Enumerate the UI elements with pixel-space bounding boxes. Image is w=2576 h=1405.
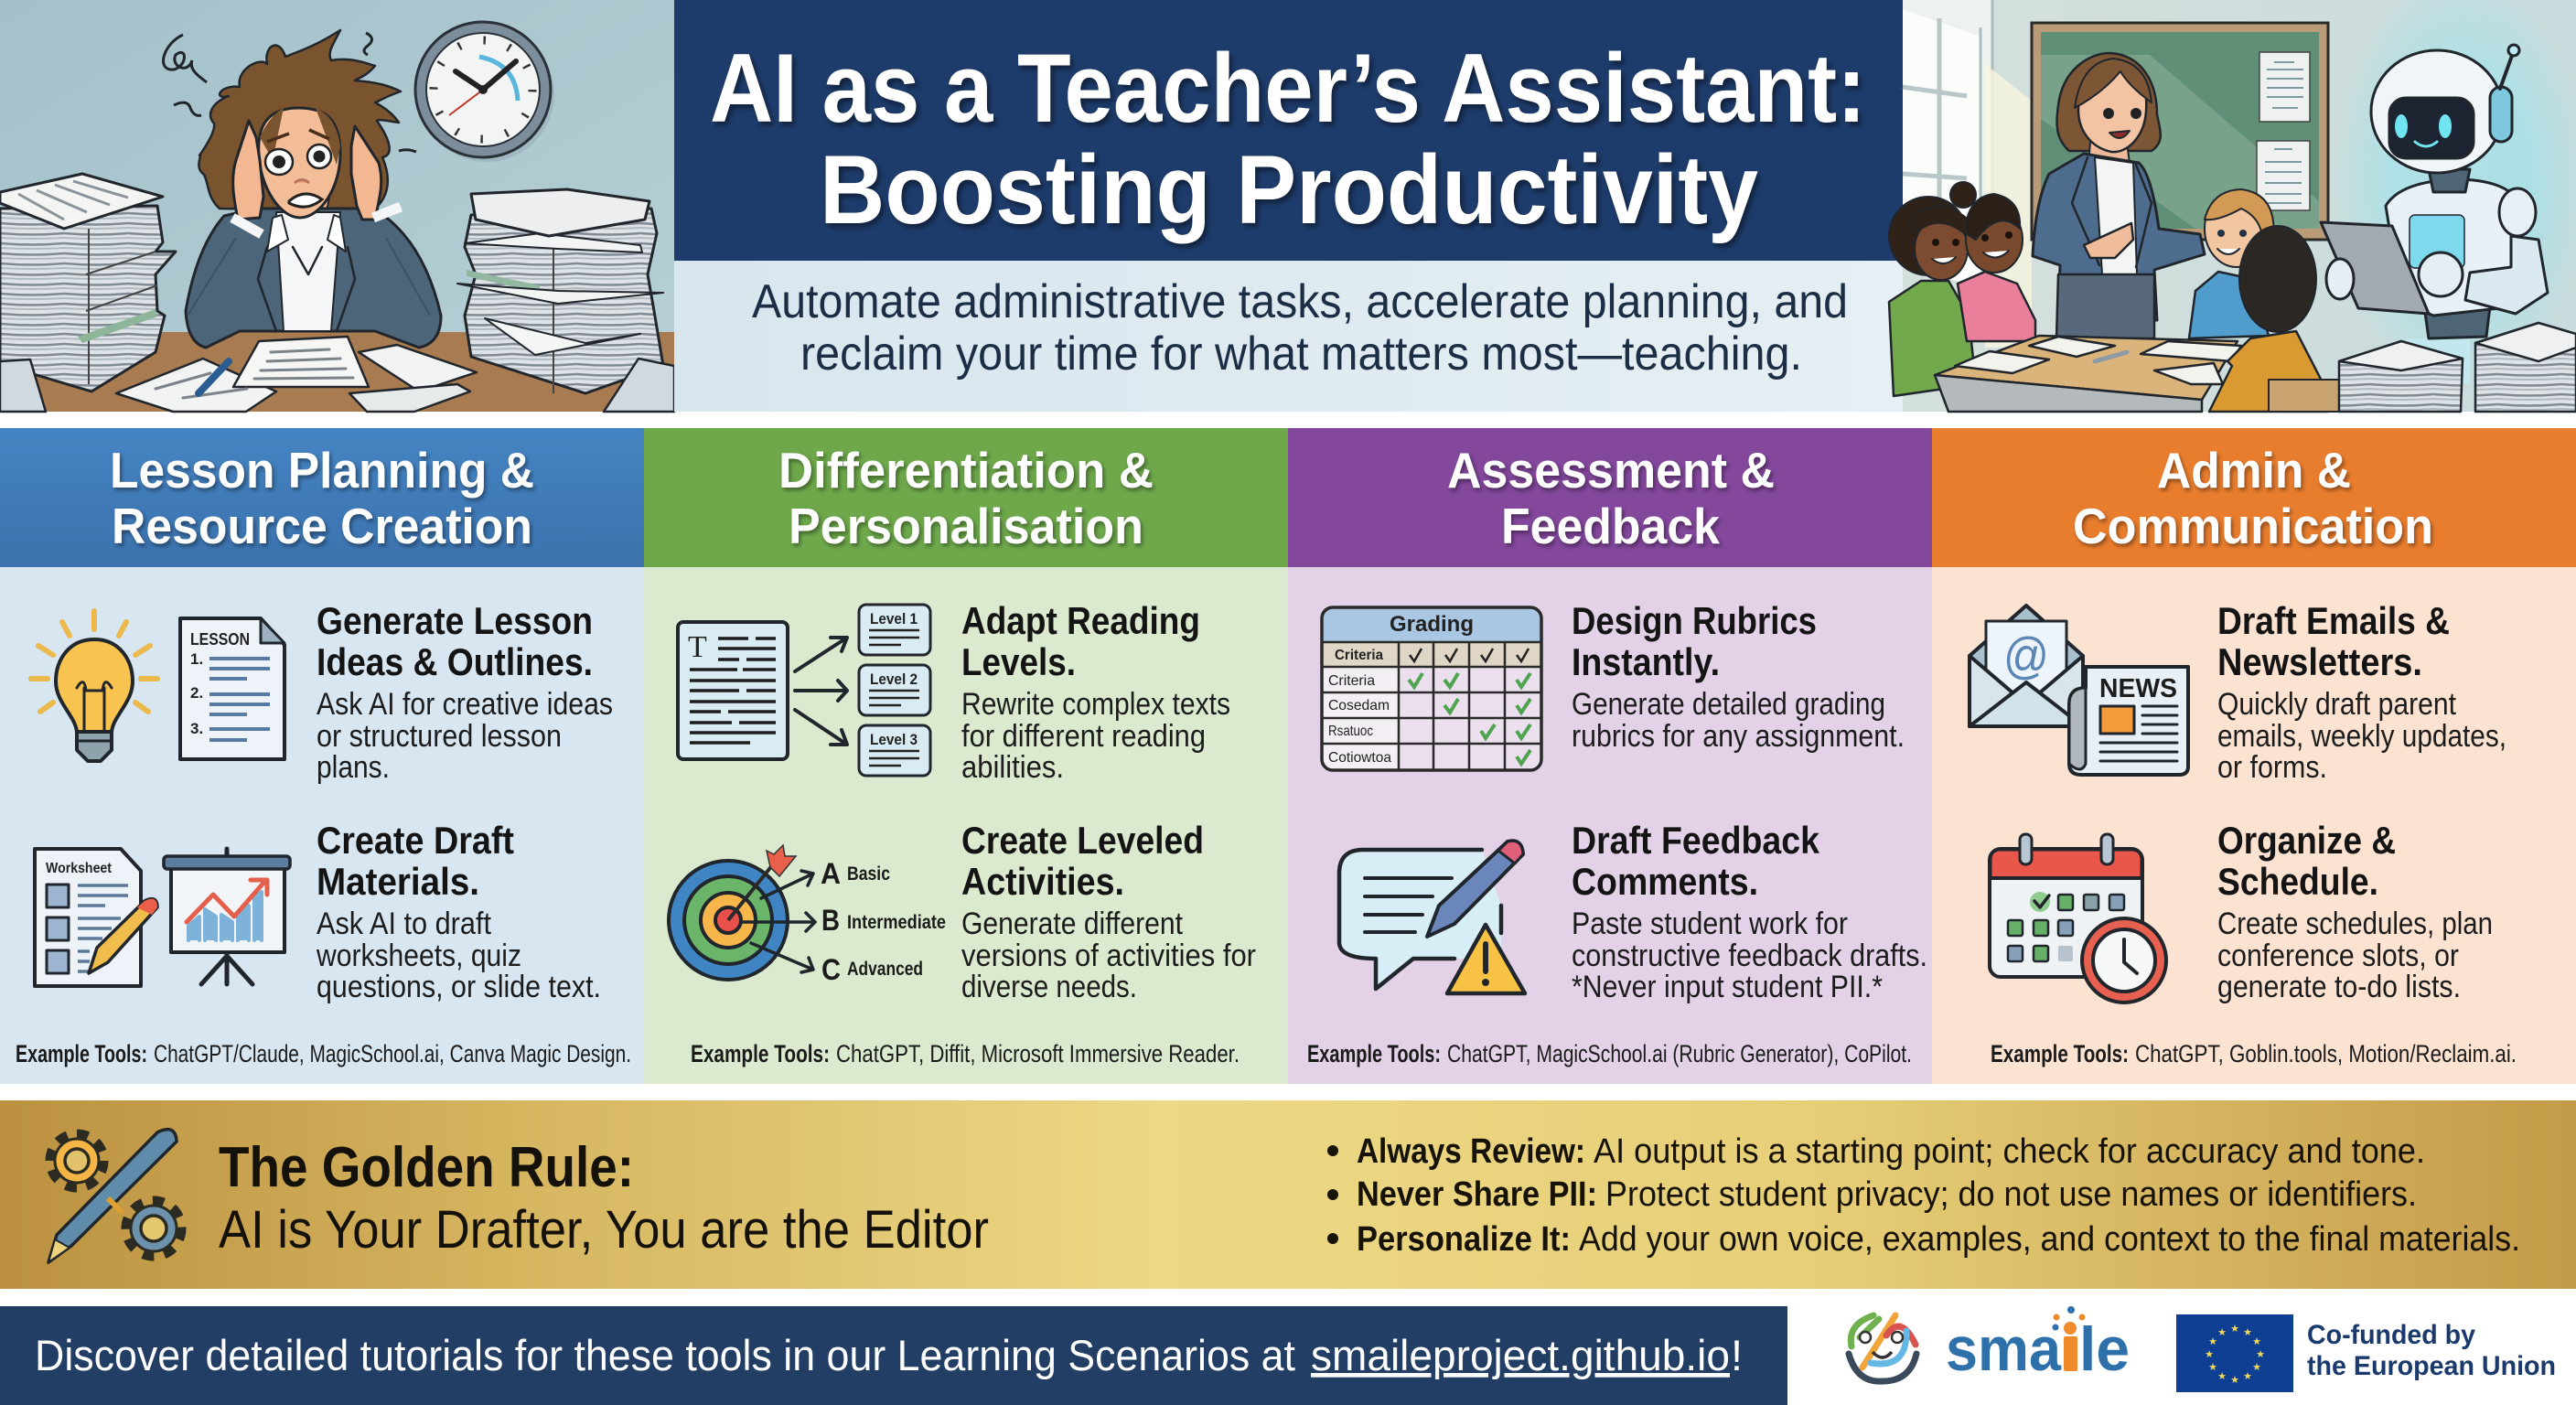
icon: text adapted to three levels: T xyxy=(688,630,707,664)
illustration: teacher with students and AI robot xyxy=(1889,0,2576,412)
footer call to action xyxy=(0,1306,1787,1405)
title banner: AI as a Teacher’s Assistant: xyxy=(710,33,1866,143)
text: generate lesson ideas xyxy=(317,599,613,785)
text: generate lesson ideas: Ideas & Outlines. xyxy=(317,640,593,683)
example tools xyxy=(16,1040,631,1067)
golden rule heading: The Golden Rule: xyxy=(219,1136,634,1199)
example tools: ChatGPT, MagicSchool.ai (Rubric Generator), CoPilot. xyxy=(1447,1040,1912,1067)
footer call to action: Discover detailed tutorials for these tools in our Learning Scenarios at xyxy=(35,1331,1295,1379)
text: organize and schedule: generate to-do lists. xyxy=(2217,970,2461,1004)
golden rule bullets: Personalize It: xyxy=(1357,1220,1571,1259)
example tools: Example Tools: xyxy=(1307,1040,1441,1067)
subtitle: Automate administrative tasks, accelerate planning, and xyxy=(752,275,1848,328)
text: organize and schedule: Schedule. xyxy=(2217,860,2378,903)
text: draft feedback xyxy=(1572,819,1927,1004)
footer call to action: smaileproject.github.io xyxy=(1311,1331,1730,1379)
text: create leveled activities: Activities. xyxy=(961,860,1124,903)
column heading: Assessment & xyxy=(1447,442,1775,499)
column heading: Resource Creation xyxy=(112,498,532,554)
icon: target with levels A B C: A xyxy=(821,857,841,890)
icon: text adapted to three levels: Level 2 xyxy=(870,670,918,688)
example tools: ChatGPT/Claude, MagicSchool.ai, Canva Magic Design. xyxy=(154,1040,631,1067)
text: create leveled activities: Generate different xyxy=(961,906,1183,941)
column heading: Differentiation & xyxy=(778,442,1154,499)
subtitle: reclaim your time for what matters most—teaching. xyxy=(800,327,1802,381)
icon: grading rubric table xyxy=(1322,607,1541,770)
icon: lesson document: 1. xyxy=(190,650,203,668)
text: create leveled activities xyxy=(961,819,1256,1004)
golden rule bullets: Always Review: xyxy=(1357,1132,1585,1171)
text: create draft materials: questions, or slide text. xyxy=(317,970,601,1004)
robot assistant xyxy=(2321,0,2576,393)
paper stack left xyxy=(0,174,176,391)
text: adapt reading levels: abilities. xyxy=(961,750,1064,785)
panel: differentiation xyxy=(644,428,1288,1084)
column heading: Communication xyxy=(2073,498,2433,554)
text: create draft materials xyxy=(316,819,601,1004)
subtitle xyxy=(674,261,1903,412)
logo: EU flag and co-funded text: ★ xyxy=(2217,1327,2227,1338)
icon: worksheet with pencil xyxy=(35,849,157,986)
icon: envelope and newspaper: @ xyxy=(2003,627,2049,684)
panel: admin xyxy=(1932,428,2576,1084)
icon: lesson document: 3. xyxy=(190,720,203,737)
column heading xyxy=(0,428,644,567)
text: draft feedback: Paste student work for xyxy=(1572,906,1848,941)
logo: smaile: sma xyxy=(1946,1314,2062,1384)
golden rule bullets: AI output is a starting point; check for accuracy and tone. xyxy=(1594,1132,2425,1171)
text: create draft materials: worksheets, quiz xyxy=(316,938,521,973)
window xyxy=(1902,0,2032,348)
logo: EU flag and co-funded text: ★ xyxy=(2217,1371,2227,1382)
text: design rubrics xyxy=(1572,599,1905,754)
text: generate lesson ideas: Ask AI for creative ideas xyxy=(317,687,613,722)
text: adapt reading levels xyxy=(961,599,1230,785)
icon: target with levels A B C: Intermediate xyxy=(847,912,946,933)
text: draft emails xyxy=(2217,599,2506,785)
icon: feedback bubble, pen and warning xyxy=(1339,841,1525,993)
classroom table xyxy=(1935,336,2241,412)
title banner xyxy=(674,0,1903,261)
icon: lesson document xyxy=(180,618,284,759)
desk papers and pencil xyxy=(0,337,674,412)
text: generate lesson ideas: or structured lesson xyxy=(317,719,562,754)
icon: text adapted to three levels: Level 1 xyxy=(870,610,918,627)
text: design rubrics: rubrics for any assignment. xyxy=(1572,719,1905,754)
example tools xyxy=(691,1040,1240,1067)
text: create draft materials: Materials. xyxy=(317,860,479,903)
text: design rubrics: Design Rubrics xyxy=(1572,599,1817,642)
icon: lesson document: 2. xyxy=(190,684,203,702)
icon: target with levels A B C xyxy=(669,845,946,986)
paper stack right xyxy=(457,189,663,393)
title banner: Boosting Productivity xyxy=(820,134,1758,244)
icon: envelope and newspaper xyxy=(1970,606,2188,775)
illustration: overwhelmed teacher at desk xyxy=(0,0,674,412)
text: organize and schedule: conference slots, or xyxy=(2217,938,2459,973)
icon: light bulb xyxy=(31,611,157,761)
text: draft feedback: Draft Feedback xyxy=(1572,819,1820,862)
text: draft emails: or forms. xyxy=(2217,750,2327,785)
logo: EU flag and co-funded text: ★ xyxy=(2230,1375,2239,1386)
icon: presentation board with chart xyxy=(164,849,290,984)
example tools: Example Tools: xyxy=(691,1040,830,1067)
bulletin board xyxy=(2032,23,2328,240)
text: create leveled activities: diverse needs. xyxy=(961,970,1137,1004)
example tools: Example Tools: xyxy=(16,1040,147,1067)
golden rule bullets xyxy=(1327,1132,2520,1259)
icon: wall clock xyxy=(415,22,554,162)
column heading: Feedback xyxy=(1501,498,1720,554)
golden rule bullets: Never Share PII: xyxy=(1357,1175,1597,1214)
column heading xyxy=(1288,428,1932,567)
column heading: Personalisation xyxy=(789,498,1143,554)
icon: calendar and clock xyxy=(1990,834,2166,1003)
logo: EU flag and co-funded text: ★ xyxy=(2252,1336,2261,1347)
golden rule heading: AI is Your Drafter, You are the Editor xyxy=(219,1200,989,1260)
icon: worksheet with pencil: Worksheet xyxy=(46,861,113,876)
column heading: Lesson Planning & xyxy=(110,442,534,499)
icon: text adapted to three levels: Level 3 xyxy=(870,731,918,748)
column heading xyxy=(1932,428,2576,567)
icon: target with levels A B C: B xyxy=(821,904,840,937)
stress scribbles xyxy=(164,33,416,152)
student seen from behind xyxy=(2209,226,2340,412)
text: create leveled activities: versions of activities for xyxy=(961,938,1256,973)
panel: assessment xyxy=(1288,428,1932,1084)
text: organize and schedule: Create schedules, plan xyxy=(2217,906,2493,941)
icon: target with levels A B C: C xyxy=(821,953,841,986)
logo: EU flag and co-funded text: ★ xyxy=(2205,1349,2214,1360)
icon: grading rubric table: Cotiowtoa xyxy=(1328,750,1391,766)
golden rule heading xyxy=(219,1136,989,1260)
text: draft feedback: constructive feedback drafts. xyxy=(1572,938,1927,973)
text: draft feedback: Comments. xyxy=(1572,860,1758,903)
golden rule banner xyxy=(0,1100,2576,1289)
example tools: ChatGPT, Diffit, Microsoft Immersive Reader. xyxy=(836,1040,1240,1067)
logo: EU flag and co-funded text: Co-funded by xyxy=(2307,1320,2475,1350)
text: design rubrics: Instantly. xyxy=(1572,640,1720,683)
text: adapt reading levels: Levels. xyxy=(961,640,1076,683)
text: draft feedback: *Never input student PII.* xyxy=(1572,970,1883,1004)
text: adapt reading levels: for different reading xyxy=(961,719,1206,754)
example tools: Example Tools: xyxy=(1991,1040,2129,1067)
icon: grading rubric table: Rsatuoc xyxy=(1328,724,1373,739)
logo: smaile: le xyxy=(2079,1314,2130,1384)
panel: lesson planning xyxy=(0,428,644,1084)
text: adapt reading levels: Adapt Reading xyxy=(961,599,1200,642)
example tools xyxy=(1991,1040,2517,1067)
text: draft emails: Newsletters. xyxy=(2217,640,2422,683)
text: organize and schedule xyxy=(2217,819,2493,1004)
icon: envelope and newspaper: NEWS xyxy=(2099,674,2177,703)
logo: EU flag and co-funded text: the European Union xyxy=(2307,1351,2556,1381)
logo: EU flag and co-funded text: ★ xyxy=(2208,1336,2217,1347)
text: create draft materials: Ask AI to draft xyxy=(317,906,491,941)
teacher figure xyxy=(2033,53,2205,338)
text: draft emails: Draft Emails & xyxy=(2217,599,2450,642)
logo: EU flag and co-funded text: ★ xyxy=(2256,1349,2265,1360)
text: draft emails: emails, weekly updates, xyxy=(2217,719,2506,754)
icon: pen and gears xyxy=(48,1130,178,1262)
paper stacks beside robot xyxy=(2339,323,2576,412)
text: draft emails: Quickly draft parent xyxy=(2217,687,2456,722)
logo: EU flag and co-funded text: ★ xyxy=(2208,1362,2217,1373)
example tools xyxy=(1307,1040,1912,1067)
text: create draft materials: Create Draft xyxy=(317,819,514,862)
text: organize and schedule: Organize & xyxy=(2217,819,2396,862)
icon: grading rubric table: Criteria xyxy=(1328,673,1375,689)
icon: target with levels A B C: Advanced xyxy=(847,959,923,980)
logo: EU flag and co-funded text: ★ xyxy=(2230,1324,2239,1335)
text: create leveled activities: Create Leveled xyxy=(961,819,1204,862)
icon: text adapted to three levels xyxy=(678,605,930,776)
column heading xyxy=(644,428,1288,567)
logo: EU flag and co-funded text: ★ xyxy=(2243,1371,2252,1382)
teacher figure: stressed woman xyxy=(186,30,441,348)
icon: grading rubric table: Cosedam xyxy=(1328,698,1390,713)
logo: EU flag and co-funded text: ★ xyxy=(2252,1362,2261,1373)
golden rule bullets: Protect student privacy; do not use names or identifiers. xyxy=(1605,1175,2417,1214)
text: generate lesson ideas: Generate Lesson xyxy=(317,599,593,642)
text: adapt reading levels: Rewrite complex texts xyxy=(961,687,1230,722)
text: design rubrics: Generate detailed grading xyxy=(1572,687,1885,722)
footer call to action: ! xyxy=(1731,1331,1743,1379)
logo: smaile xyxy=(1849,1306,2130,1384)
students group xyxy=(1889,182,2274,396)
column heading: Admin & xyxy=(2157,442,2351,499)
logo: EU flag and co-funded text: ★ xyxy=(2243,1327,2252,1338)
text: generate lesson ideas: plans. xyxy=(317,750,390,785)
icon: grading rubric table: Grading xyxy=(1390,612,1474,637)
icon: lesson document: LESSON xyxy=(190,630,250,649)
icon: grading rubric table: Criteria xyxy=(1335,648,1383,663)
logo: EU flag and co-funded text xyxy=(2176,1314,2556,1392)
golden rule bullets: Add your own voice, examples, and context to the final materials. xyxy=(1579,1220,2520,1259)
icon: target with levels A B C: Basic xyxy=(847,863,890,885)
